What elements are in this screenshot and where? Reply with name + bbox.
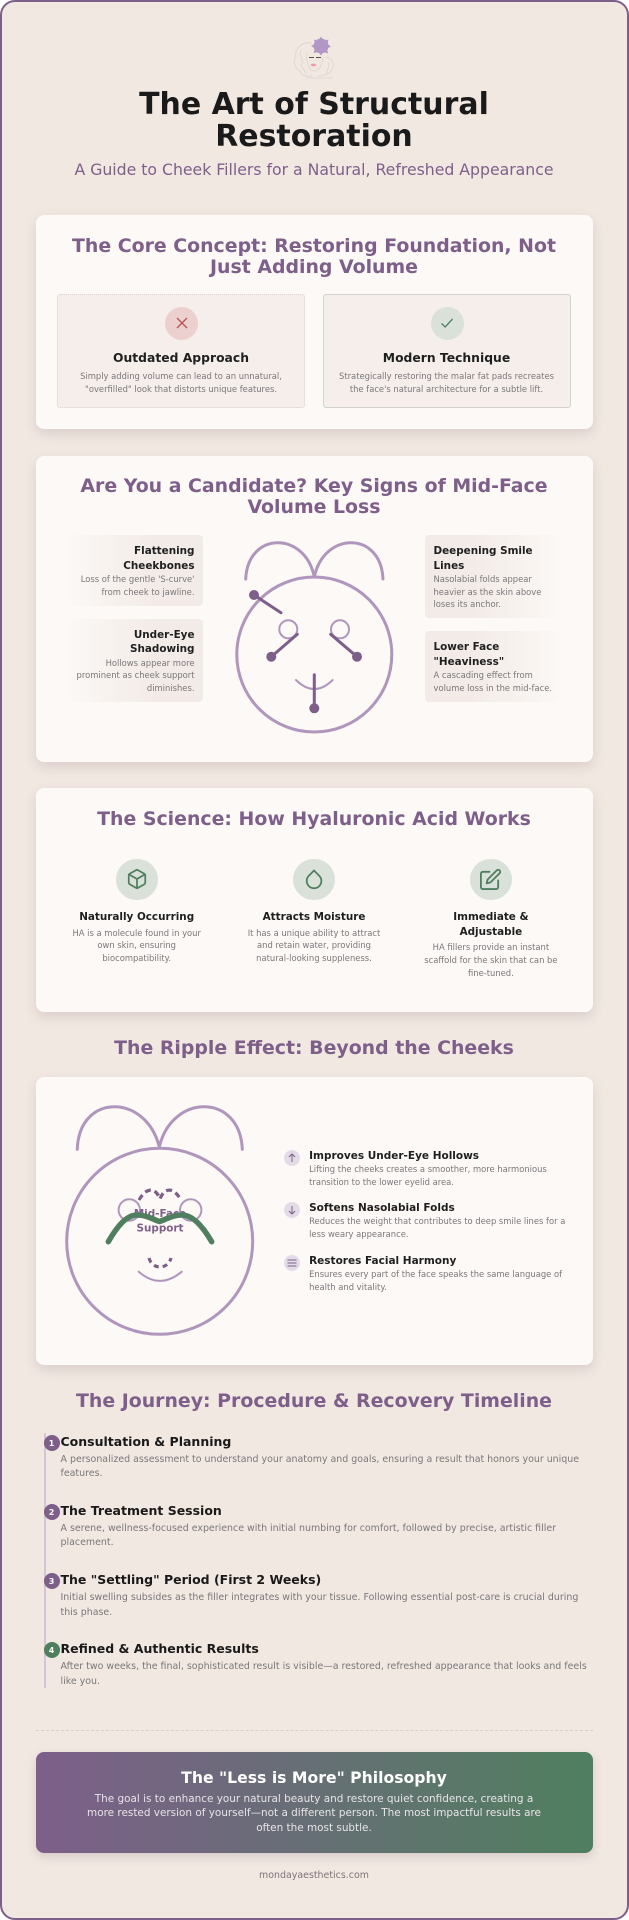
title: outdated approach: Outdated Approach <box>113 350 249 364</box>
sign: under-eye shadowing <box>64 618 203 702</box>
step 4 <box>44 1641 587 1687</box>
number badge 1: 1 <box>49 1438 54 1448</box>
feature title: Naturally Occurring <box>79 911 194 923</box>
feature text: natural-looking suppleness. <box>256 953 372 963</box>
sign title: "Heaviness" <box>433 655 504 667</box>
number badge 3 <box>44 1573 60 1589</box>
sign title: Lower Face <box>433 641 499 653</box>
sign title: Shadowing <box>130 643 194 655</box>
benefit text <box>309 1216 565 1239</box>
feature text: biocompatibility. <box>102 953 171 963</box>
benefit text <box>309 1164 547 1187</box>
step title: The Treatment Session <box>60 1502 222 1517</box>
title: Restoration <box>215 119 413 154</box>
step text <box>60 1523 556 1548</box>
sign text: Nasolabial folds appear <box>433 574 532 584</box>
feature text: scaffold for the skin that can be <box>424 955 558 965</box>
icon: lines <box>284 1254 300 1271</box>
benefit title: Restores Facial Harmony <box>309 1255 456 1267</box>
feature text: own skin, ensuring <box>97 940 176 950</box>
sign text <box>433 574 541 609</box>
feature title: Adjustable <box>460 926 522 938</box>
banner text: The goal is to enhance your natural beauty and restore quiet confidence, creating a <box>95 1793 533 1805</box>
icon: check <box>430 306 464 340</box>
icon: cube <box>116 858 158 900</box>
panel: candidate signs <box>36 456 592 762</box>
sign title: Under-Eye <box>134 629 194 641</box>
number badge 4 <box>44 1642 60 1658</box>
heading: core concept: Just Adding Volume <box>210 255 418 277</box>
panel: ripple effect <box>36 1076 592 1364</box>
sign title <box>433 641 504 667</box>
diagram: mid-face support: Mid-Face <box>133 1208 186 1220</box>
benefit text <box>309 1269 562 1292</box>
feature title: Attracts Moisture <box>263 911 365 923</box>
description: modern technique: Strategically restoring the malar fat pads recreates <box>339 371 554 381</box>
benefit text: Lifting the cheeks creates a smoother, more harmonious <box>309 1164 547 1174</box>
sign title <box>433 545 533 572</box>
number badge 1 <box>44 1434 60 1450</box>
feature title <box>453 911 529 938</box>
feature text: It has a unique ability to attract <box>248 927 380 937</box>
footer: mondayaesthetics.com <box>259 1870 369 1881</box>
step text: A personalized assessment to understand your anatomy and goals, ensuring a result that honors your unique <box>60 1454 579 1465</box>
step text: placement. <box>60 1537 114 1548</box>
heading: core concept: The Core Concept: Restoring Foundation, Not <box>72 234 556 256</box>
sign text <box>433 670 552 693</box>
sign text: loses its anchor. <box>433 599 501 609</box>
benefit text: Ensures every part of the face speaks the same language of <box>309 1269 562 1279</box>
modern technique box <box>322 294 570 408</box>
heading: ripple effect: The Ripple Effect: Beyond the Cheeks <box>114 1037 514 1059</box>
sign title: Deepening Smile <box>433 545 533 557</box>
heading: candidate <box>80 475 548 518</box>
sign text: heavier as the skin above <box>433 586 541 596</box>
step text <box>60 1454 579 1479</box>
sign text: volume loss in the mid-face. <box>433 683 552 693</box>
sign text: Loss of the gentle 'S-curve' <box>81 574 194 584</box>
heading: core concept <box>72 234 556 277</box>
description: outdated approach <box>80 371 282 394</box>
sign text: A cascading effect from <box>433 670 533 680</box>
step 3 <box>44 1572 578 1618</box>
feature: attracts moisture <box>248 859 380 963</box>
step text <box>60 1661 587 1687</box>
step text: this phase. <box>60 1607 112 1618</box>
step text <box>60 1592 578 1618</box>
step text: Initial swelling subsides as the filler integrates with your tissue. Following essential post-care is crucial during <box>60 1592 578 1603</box>
feature text <box>72 927 201 963</box>
banner title: The "Less is More" Philosophy <box>181 1768 447 1786</box>
sign title: Cheekbones <box>123 560 194 572</box>
step text: like you. <box>60 1676 100 1687</box>
sign title: Lines <box>433 560 464 572</box>
sign title <box>130 629 194 655</box>
heading: candidate: Are You a Candidate? Key Signs of Mid-Face <box>80 475 548 497</box>
panel: core concept <box>36 214 592 428</box>
feature text: fine-tuned. <box>468 967 514 977</box>
icon: droplet <box>293 858 335 900</box>
subtitle: A Guide to Cheek Fillers for a Natural, Refreshed Appearance <box>74 160 554 179</box>
step text: A serene, wellness-focused experience with initial numbing for comfort, followed by precise, artistic filler <box>60 1523 556 1534</box>
benefit title: Improves Under-Eye Hollows <box>309 1150 479 1162</box>
title: modern technique: Modern Technique <box>383 350 510 364</box>
outdated approach box <box>57 294 305 408</box>
banner text <box>87 1793 541 1834</box>
sign text: diminishes. <box>147 683 194 693</box>
feature: immediate and adjustable <box>424 859 558 977</box>
heading: journey: The Journey: Procedure & Recovery Timeline <box>76 1390 552 1412</box>
step 1 <box>44 1433 579 1479</box>
banner text: more rested version of yourself—not a different person. The most impactful results are <box>87 1807 541 1819</box>
heading: candidate: Volume Loss <box>247 496 381 518</box>
step 2 <box>44 1502 556 1548</box>
feature text <box>248 927 380 963</box>
sign text <box>77 657 194 693</box>
description: modern technique: the face's natural architecture for a subtle lift. <box>350 384 543 394</box>
benefit: under-eye hollows <box>284 1150 547 1187</box>
number badge 4: 4 <box>49 1646 54 1655</box>
sign: flattening cheekbones <box>64 534 203 606</box>
step title: Consultation & Planning <box>60 1433 231 1448</box>
banner text: often the most subtle. <box>256 1822 372 1834</box>
sign: lower face heaviness <box>425 631 564 702</box>
description: modern technique <box>339 371 554 394</box>
benefit text: health and vitality. <box>309 1281 387 1291</box>
banner: less is more <box>36 1752 592 1852</box>
benefit text: transition to the lower eyelid area. <box>309 1176 454 1186</box>
description: outdated approach: Simply adding volume can lead to an unnatural, <box>80 371 282 381</box>
sign: deepening smile lines <box>425 534 564 618</box>
sign text: from cheek to jawline. <box>101 586 194 596</box>
number badge 3: 3 <box>49 1577 54 1586</box>
feature text: HA fillers provide an instant <box>433 942 549 952</box>
sign text: Hollows appear more <box>106 657 194 667</box>
feature text: HA is a molecule found in your <box>72 927 201 937</box>
step text: After two weeks, the final, sophisticated result is visible—a restored, refreshed appearance that looks and feels <box>60 1661 587 1672</box>
feature: naturally occurring <box>72 859 201 963</box>
sign title <box>123 545 194 572</box>
step text: features. <box>60 1468 102 1479</box>
title: The Art of Structural <box>139 87 489 122</box>
heading: science: The Science: How Hyaluronic Acid Works <box>97 808 531 830</box>
icon: arrow up <box>284 1150 300 1166</box>
feature text: and retain water, providing <box>257 940 371 950</box>
benefit title: Softens Nasolabial Folds <box>309 1202 455 1214</box>
timeline <box>44 1432 592 1688</box>
number badge 2 <box>44 1504 60 1520</box>
benefit: nasolabial folds <box>284 1202 565 1239</box>
title <box>139 87 489 154</box>
icon: logo of woman with flower <box>294 36 334 78</box>
diagram: mid-face support: Support <box>136 1222 183 1234</box>
diagram: mid-face support <box>65 1105 254 1336</box>
sign text <box>81 574 194 597</box>
sign title: Flattening <box>134 545 194 557</box>
benefit: facial harmony <box>284 1255 562 1292</box>
description: outdated approach: "overfilled" look that distorts unique features. <box>85 384 277 394</box>
step title: The "Settling" Period (First 2 Weeks) <box>60 1572 321 1587</box>
icon: edit <box>470 858 512 900</box>
step title: Refined & Authentic Results <box>60 1641 259 1656</box>
number badge 2: 2 <box>49 1508 54 1516</box>
feature text <box>424 942 558 977</box>
panel: the science <box>36 788 592 1012</box>
icon: arrow down <box>284 1202 300 1218</box>
diagram: face with marked signs <box>235 541 394 734</box>
benefit text: less weary appearance. <box>309 1229 409 1239</box>
benefit text: Reduces the weight that contributes to deep smile lines for a <box>309 1216 565 1226</box>
feature title: Immediate & <box>453 911 529 923</box>
icon: cross <box>165 306 198 340</box>
sign text: prominent as cheek support <box>77 670 194 680</box>
